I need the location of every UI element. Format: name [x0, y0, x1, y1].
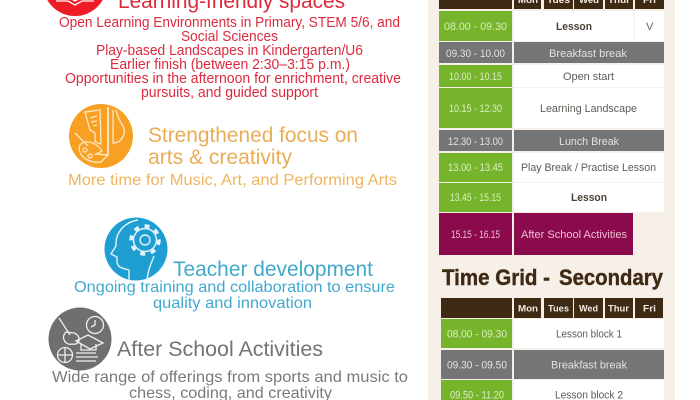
heading: strengthened focus: Strengthened focus on — [148, 123, 358, 147]
row: lesson block 1: 08.00 - 09.30 — [447, 328, 507, 340]
row: lunch break: Lunch Break — [559, 136, 619, 148]
row: lunch break: 12.30 - 13.00 — [448, 136, 503, 148]
text block: learning spaces details: Open Learning Environments in Primary, STEM 5/6, and — [59, 15, 400, 31]
heading: time grid secondary: Secondary — [559, 265, 664, 290]
panel: after school activities — [48, 308, 408, 400]
row: 08.00 lesson — [439, 11, 664, 41]
text block: arts details: More time for Music, Art, and Performing Arts — [68, 172, 397, 189]
panel: learning-friendly spaces — [43, 0, 401, 101]
text block: teacher details: Ongoing training and collaboration to ensure — [74, 279, 395, 296]
icon: arts mask, violin and palette — [69, 104, 133, 168]
row: play break: Play Break / Practise Lesson — [521, 162, 656, 174]
heading: after school activities: After School Activities — [117, 337, 323, 361]
row: learning landscape — [439, 88, 664, 128]
row: after school activities: 15.15 - 16.15 — [451, 229, 500, 241]
row: secondary breakfast break: 09.30 - 09.50 — [447, 360, 507, 372]
table header: secondary days: Mon — [518, 304, 538, 314]
row: lesson block 1: Lesson block 1 — [556, 328, 622, 340]
row: lesson block 2 — [441, 380, 664, 400]
table header: secondary days: Thur — [608, 304, 629, 314]
text block: after school details: Wide range of offerings from sports and music to — [52, 369, 408, 386]
text block: learning spaces details: Social Sciences — [181, 29, 278, 45]
row: 08.00 lesson: 08.00 - 09.30 — [444, 21, 507, 33]
table: secondary time grid — [441, 298, 664, 400]
text block: learning spaces details: Earlier finish (between 2:30–3:15 p.m.) — [110, 57, 350, 73]
row: breakfast break: Breakfast break — [549, 48, 627, 60]
text block: teacher details: quality and innovation — [153, 295, 312, 312]
heading: strengthened focus: arts & creativity — [148, 145, 292, 169]
table header: primary days — [439, 0, 664, 9]
row: secondary breakfast break — [441, 350, 664, 379]
row: learning landscape: Learning Landscape — [540, 103, 637, 115]
heading: time grid secondary — [442, 265, 664, 290]
row: learning landscape: 10.15 - 12.30 — [449, 103, 502, 115]
row: 08.00 lesson: Lesson — [556, 21, 592, 33]
table header: secondary days — [441, 298, 663, 318]
table header: secondary days: Wed — [579, 304, 598, 314]
row: after school activities: After School Activities — [521, 229, 627, 241]
text block: learning spaces details: Play-based Landscapes in Kindergarten/U6 — [96, 43, 363, 59]
heading: strengthened focus — [148, 123, 358, 169]
panel: arts and creativity — [68, 104, 397, 189]
row: after school activities — [439, 213, 633, 255]
row: open start: Open start — [563, 71, 614, 83]
row: breakfast break: 09.30 - 10.00 — [446, 48, 505, 60]
text block: learning spaces details: Opportunities in the afternoon for enrichment, creative — [65, 71, 401, 87]
row: 08.00 lesson: V — [646, 21, 654, 33]
icon: open book on red circle — [43, 0, 107, 16]
table header: secondary days: Fri — [643, 304, 656, 314]
row: play break — [439, 153, 664, 182]
row: open start — [439, 65, 664, 87]
row: breakfast break — [439, 42, 664, 63]
panel: teacher development — [74, 218, 395, 312]
row: play break: 13.00 - 13.45 — [448, 162, 503, 174]
row: lesson block 1 — [441, 319, 664, 348]
heading: time grid secondary: Time Grid - — [442, 265, 550, 290]
heading: teacher development: Teacher development — [173, 257, 373, 281]
table: primary time grid — [439, 0, 664, 255]
icon: head with gear — [104, 218, 168, 280]
text block: after school details — [52, 369, 408, 400]
panel: timetable background — [428, 0, 675, 400]
row: afternoon lesson: Lesson — [571, 192, 607, 204]
row: afternoon lesson: 13.45 - 15.15 — [450, 192, 501, 204]
row: lunch break — [439, 130, 664, 151]
icon: guitar, clock, books and ball — [48, 308, 112, 370]
row: afternoon lesson — [439, 183, 664, 212]
text block: learning spaces details: pursuits, and guided support — [141, 85, 318, 101]
row: open start: 10.00 - 10.15 — [449, 71, 502, 83]
table header: secondary days: Tues — [548, 304, 569, 314]
row: secondary breakfast break: Breakfast break — [551, 360, 627, 372]
text block: teacher details — [74, 279, 395, 312]
text block: learning spaces details — [59, 15, 401, 101]
